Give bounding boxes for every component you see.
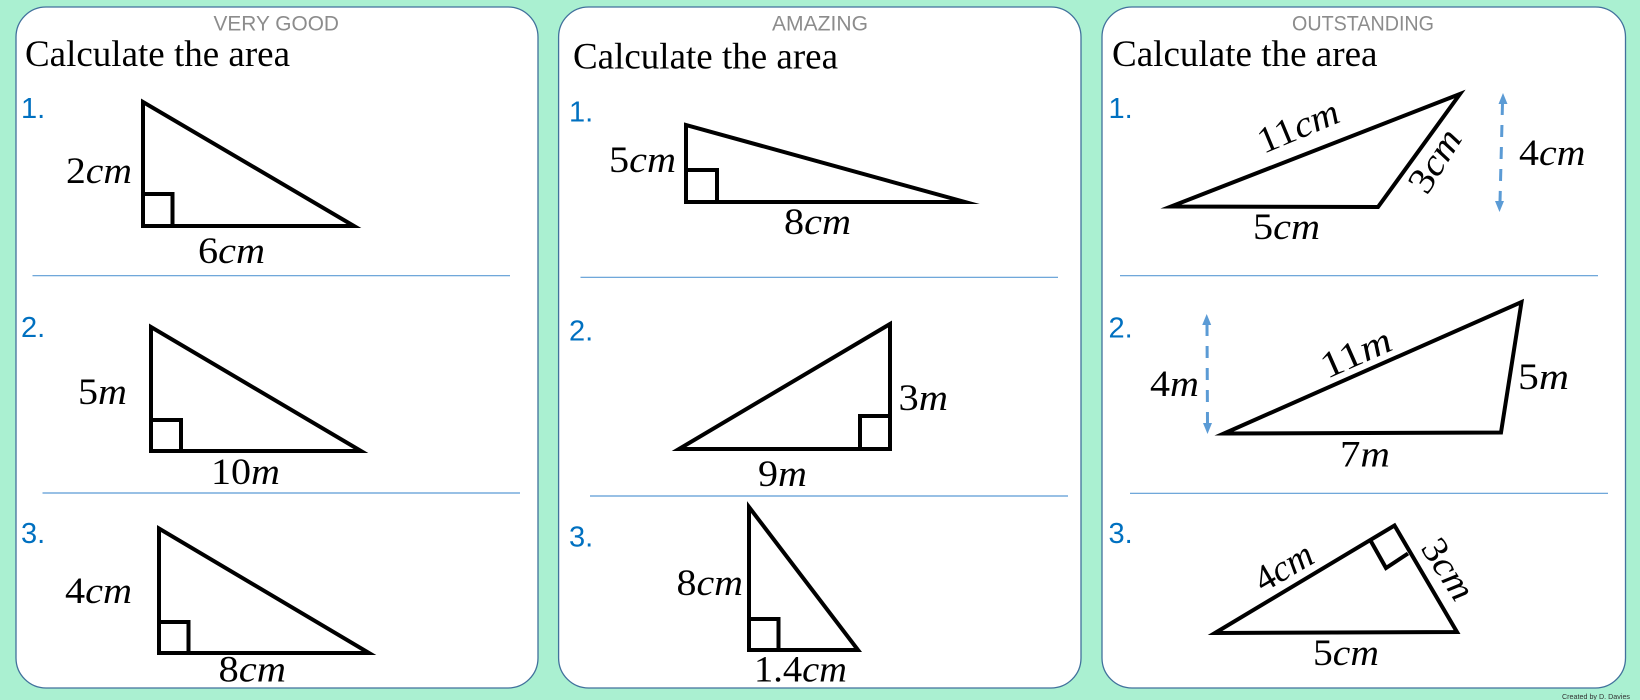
label 5m: 5m <box>1518 357 1569 398</box>
label 7m: 7m <box>1340 434 1390 476</box>
question number 2: 2. <box>569 316 593 348</box>
label 5cm: 5cm <box>609 140 676 181</box>
panel: amazing <box>559 7 1081 690</box>
label 11cm: 11cm <box>1251 92 1345 162</box>
triangle 3 <box>1215 526 1457 633</box>
label 3cm: 3cm <box>1412 531 1483 608</box>
triangle 3 <box>749 507 858 650</box>
label 8cm: 8cm <box>676 563 743 604</box>
label 4cm: 4cm <box>1519 133 1586 174</box>
triangle 1 <box>686 125 965 202</box>
question number 3: 3. <box>1108 518 1133 550</box>
panel: very good <box>16 7 538 690</box>
label 5cm: 5cm <box>1313 633 1379 674</box>
heading: very good: VERY GOOD <box>214 12 339 36</box>
heading: outstanding: OUTSTANDING <box>1292 12 1434 36</box>
question number 1: 1. <box>21 93 45 125</box>
label 1.4cm: 1.4cm <box>754 650 847 690</box>
label 5m: 5m <box>78 372 127 413</box>
label 4m: 4m <box>1150 364 1199 405</box>
question number 3: 3. <box>569 522 593 554</box>
triangle 2 <box>679 324 890 449</box>
dashed height arrow 4m <box>1202 314 1212 434</box>
label 9m: 9m <box>758 454 807 495</box>
title: Calculate the area <box>1112 34 1378 75</box>
label 3cm: 3cm <box>1400 121 1471 201</box>
label 3m: 3m <box>898 378 948 419</box>
panel background <box>16 7 538 688</box>
title: Calculate the area <box>573 36 838 78</box>
triangle 2 <box>151 327 361 451</box>
label 8cm: 8cm <box>784 202 851 243</box>
question number 1: 1. <box>569 96 593 128</box>
question number 2: 2. <box>1108 312 1133 344</box>
label 6cm: 6cm <box>198 231 265 272</box>
heading: amazing: AMAZING <box>772 12 868 36</box>
question number 3: 3. <box>21 518 45 550</box>
triangle 2 <box>1224 302 1522 434</box>
title: Calculate the area <box>25 34 290 75</box>
label 4cm: 4cm <box>65 571 132 612</box>
panel background <box>1102 7 1626 688</box>
panel background <box>559 7 1081 688</box>
label 8cm: 8cm <box>218 650 286 690</box>
dashed height arrow 4cm <box>1495 93 1508 212</box>
label 11m: 11m <box>1314 320 1398 387</box>
triangle 1 <box>143 102 354 226</box>
triangle 1 <box>1171 94 1460 207</box>
label 5cm: 5cm <box>1253 207 1320 248</box>
triangle 3 <box>159 528 369 653</box>
panel: outstanding <box>1102 7 1626 688</box>
label 2cm: 2cm <box>66 151 132 192</box>
label 4cm: 4cm <box>1247 534 1321 601</box>
question number 2: 2. <box>21 312 45 344</box>
label 10m: 10m <box>211 452 280 493</box>
question number 1: 1. <box>1108 93 1133 125</box>
